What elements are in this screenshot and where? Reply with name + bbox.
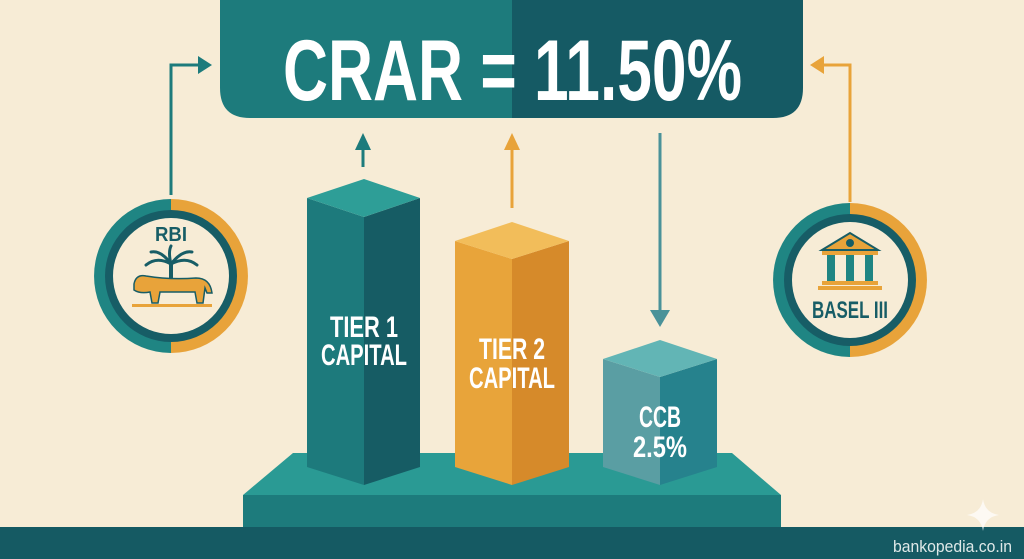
watermark: bankopedia.co.in (893, 537, 1012, 556)
icon: sparkle (967, 499, 999, 531)
arrow: tier 1 up (355, 133, 371, 167)
platform (243, 453, 781, 528)
bar: CCB 2.5%: CCB (639, 401, 681, 434)
title banner: CRAR = 11.50% (283, 23, 742, 119)
bottom strip (0, 527, 1024, 559)
bar: tier 1 capital (307, 179, 420, 485)
icon: palm and tiger (132, 246, 212, 307)
badge: RBI (94, 199, 248, 353)
bar: tier 1 capital: CAPITAL (321, 339, 407, 372)
title banner (220, 0, 803, 119)
arrow: tier 2 up (504, 133, 520, 208)
bar: CCB 2.5% (603, 340, 717, 485)
bar: CCB 2.5%: 2.5% (633, 431, 687, 464)
icon: bank building (818, 233, 882, 290)
bar: tier 2 capital: TIER 2 (479, 333, 545, 366)
arrow: RBI to banner (171, 56, 212, 195)
bar: tier 2 capital: CAPITAL (469, 362, 555, 395)
arrow: Basel III to banner (810, 56, 850, 202)
arrow: down to CCB (650, 133, 670, 327)
bar: tier 1 capital: TIER 1 (330, 311, 398, 344)
badge: Basel III: BASEL III (812, 297, 888, 324)
bar: tier 2 capital (455, 222, 569, 485)
badge: RBI: RBI (155, 224, 187, 246)
badge: Basel III (773, 203, 927, 357)
